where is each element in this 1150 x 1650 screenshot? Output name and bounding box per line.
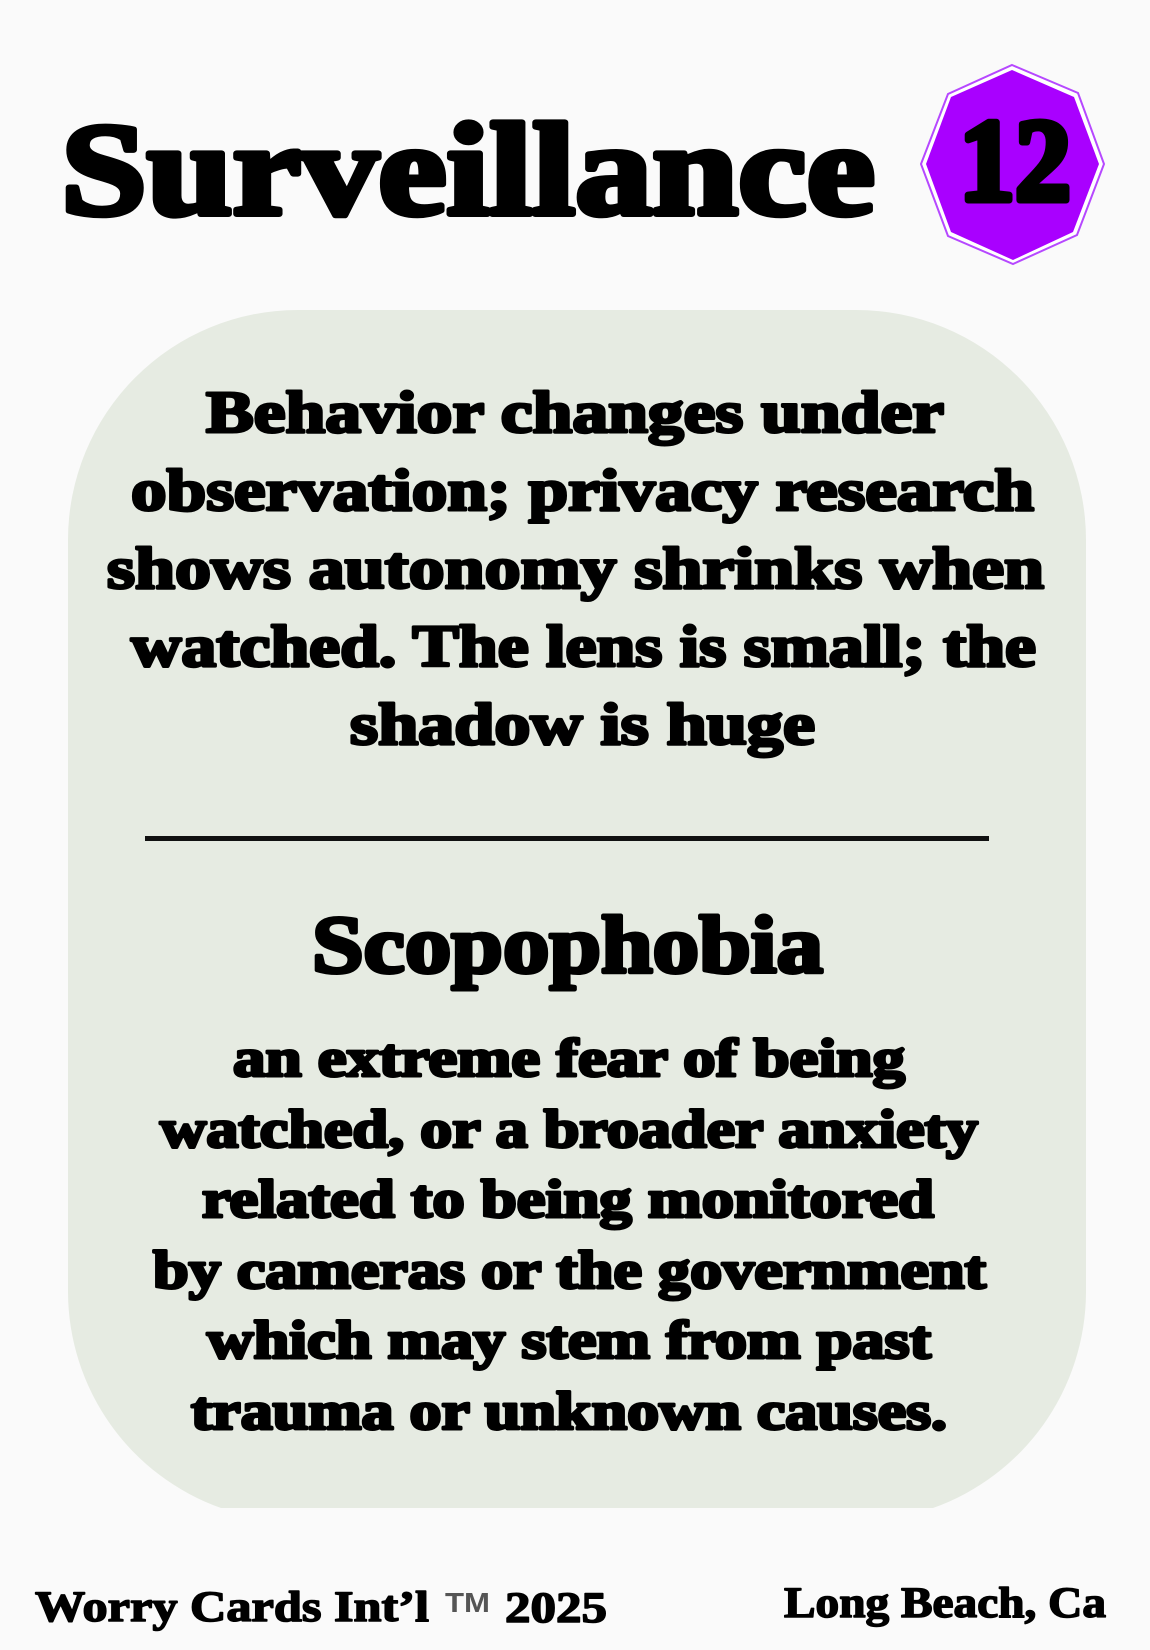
badge: number 12 xyxy=(921,65,1104,264)
footer: copyright: Worry Cards Int’l xyxy=(35,1584,429,1631)
footer: copyright: TM xyxy=(445,1587,490,1618)
text block: definition: by cameras or the government xyxy=(153,1240,986,1300)
text block: definition: trauma or unknown causes. xyxy=(191,1381,947,1441)
text block: definition: an extreme fear of being xyxy=(233,1028,905,1088)
heading: Scopophobia: Scopophobia xyxy=(312,899,823,990)
text block: observation note: shows autonomy shrinks when xyxy=(107,535,1044,601)
text block: definition: watched, or a broader anxiety xyxy=(160,1099,978,1159)
text block: definition: related to being monitored xyxy=(202,1169,934,1229)
title: Surveillance xyxy=(61,96,875,243)
text block: observation note: observation; privacy research xyxy=(131,457,1034,523)
panel: card content xyxy=(68,310,1086,1508)
text block: definition xyxy=(153,1028,986,1441)
text block: observation note: watched. The lens is small; the xyxy=(131,613,1036,679)
text block: observation note xyxy=(107,379,1044,757)
badge: number 12: 12 xyxy=(959,95,1071,226)
footer: copyright xyxy=(35,1584,607,1632)
text block: definition: which may stem from past xyxy=(207,1310,931,1370)
footer: location: Long Beach, Ca xyxy=(784,1580,1106,1627)
text block: observation note: shadow is huge xyxy=(350,691,815,757)
text block: observation note: Behavior changes under xyxy=(206,379,944,445)
footer: copyright: 2025 xyxy=(505,1585,607,1632)
panel background xyxy=(68,310,1086,1508)
